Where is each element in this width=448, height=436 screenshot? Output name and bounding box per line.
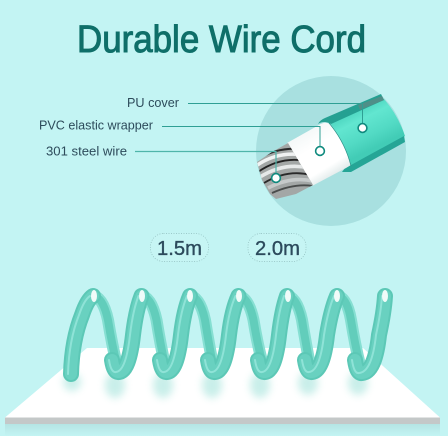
platform reflection — [5, 424, 440, 436]
PVC elastic wrapper — [287, 123, 351, 186]
PU cover sleeve — [318, 94, 405, 172]
wrapper rim shadow — [329, 123, 351, 166]
callout line: 301 steel wire — [135, 152, 276, 174]
coil highlights — [91, 290, 388, 302]
length option: 2.0m: 2.0m — [255, 238, 300, 260]
callout line: PU cover — [188, 104, 362, 124]
platform top — [5, 348, 440, 418]
301 steel wire — [257, 143, 313, 199]
dot: PU cover — [358, 124, 367, 132]
callout line: PVC elastic wrapper — [162, 126, 320, 147]
platform front edge — [5, 418, 440, 424]
label: 301 steel wire: 301 steel wire — [46, 144, 127, 158]
dot: PVC elastic wrapper — [316, 147, 324, 155]
white platform — [5, 348, 440, 436]
dot: 301 steel wire — [272, 174, 280, 182]
length option: 2.0m — [248, 234, 306, 262]
coil shadows — [63, 371, 368, 398]
background circle — [256, 76, 406, 226]
back strands of the coil — [93, 296, 360, 365]
label: PVC elastic wrapper: PVC elastic wrapper — [39, 118, 154, 132]
spring coil cable — [68, 290, 388, 374]
length option: 1.5m: 1.5m — [157, 238, 202, 260]
front strands of the coil — [68, 296, 385, 374]
label: PU cover: PU cover — [127, 95, 180, 110]
title: Durable Wire Cord — [77, 19, 366, 61]
cable cross-section diagram — [135, 76, 406, 226]
length option: 1.5m — [150, 234, 208, 262]
